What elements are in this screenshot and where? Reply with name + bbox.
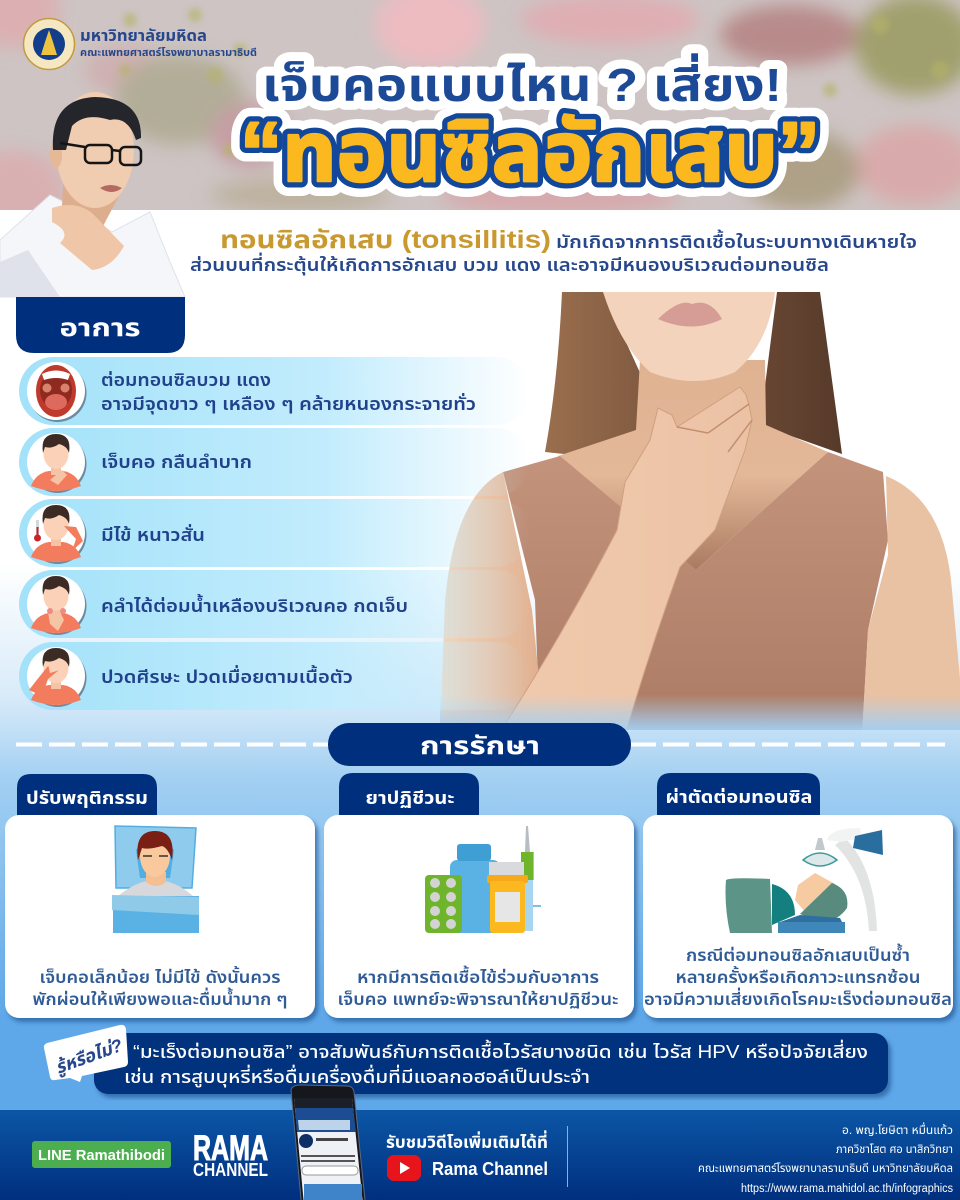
photo bottom fade <box>440 695 960 731</box>
icon: university seal <box>24 18 74 70</box>
logo and institution <box>24 18 257 70</box>
callout: did you know: “มะเร็งต่อมทอนซิล” อาจสัมพันธ์กับการติดเชื้อไวรัสบางชนิด เช่น ไวรัส HPV หรือปัจจัยเสี่ยง <box>133 1039 868 1062</box>
symptom 1: อาจมีจุดขาว ๆ เหลือง ๆ คล้ายหนองกระจายทั่ว <box>101 393 476 415</box>
text: antibiotics advice: เจ็บคอ แพทย์จะพิจารณาให้ยาปฏิชีวนะ <box>338 990 619 1009</box>
dress <box>503 452 888 735</box>
raised arm and hand <box>498 387 752 735</box>
lips <box>658 303 722 326</box>
credits: https://www.rama.mahidol.ac.th/infographics <box>741 1183 953 1195</box>
text: surgery advice: กรณีต่อมทอนซิลอักเสบเป็นซ้ำ <box>686 943 910 965</box>
neck and chest <box>558 360 828 570</box>
icon: headache person <box>27 647 86 707</box>
heading: treatment <box>328 723 631 766</box>
faculty name: คณะแพทยศาสตร์โรงพยาบาลรามาธิบดี <box>80 47 257 59</box>
text: behaviour advice: เจ็บคอเล็กน้อย ไม่มีไข้ ดังนั้นควร <box>40 966 280 987</box>
photo: man holding throat <box>0 92 185 297</box>
text: behaviour advice <box>32 966 288 1009</box>
button: LINE Ramathibodi <box>32 1141 171 1168</box>
symptom 5 <box>19 642 530 710</box>
phone mockup <box>291 1085 366 1200</box>
tab: symptoms: อาการ <box>60 314 141 342</box>
face <box>603 292 775 381</box>
icon: YouTube <box>387 1155 421 1181</box>
tab: behaviour: ปรับพฤติกรรม <box>26 788 148 808</box>
symptom 4: คลำได้ต่อมน้ำเหลืองบริเวณคอ กดเจ็บ <box>101 594 408 616</box>
text: surgery advice: หลายครั้งหรือเกิดภาวะแทรกซ้อน <box>676 966 920 987</box>
title line 2: “ทอนซิลอักเสบ” <box>240 105 820 199</box>
logo: RAMA CHANNEL: RAMA <box>193 1129 268 1168</box>
symptom 4 <box>19 570 530 638</box>
intro text: มักเกิดจากการติดเชื้อในระบบทางเดินหายใจ <box>556 229 917 252</box>
text: surgery advice: อาจมีความเสี่ยงเกิดโรคมะเร็งต่อมทอนซิล <box>644 987 952 1009</box>
title line 1: เจ็บคอแบบไหน ? เสี่ยง! <box>262 53 782 111</box>
channel call to action: Rama Channel <box>432 1159 548 1179</box>
symptom 1 <box>19 357 530 425</box>
speech bubble: did you know <box>44 1025 128 1082</box>
panel: surgery <box>643 773 953 1018</box>
text: antibiotics advice <box>338 965 619 1009</box>
credits: คณะแพทยศาสตร์โรงพยาบาลรามาธิบดี มหาวิทยาลัยมหิดล <box>698 1162 953 1175</box>
photo: woman holding throat <box>440 292 960 735</box>
footer divider <box>567 1126 568 1187</box>
icon: medicine bottles and syringe <box>425 826 541 933</box>
left arm <box>440 472 538 723</box>
credits: อ. พญ.โยษิตา หมื่นแก้ว <box>842 1122 953 1137</box>
panel: behaviour <box>5 774 315 1018</box>
right arm <box>862 476 960 735</box>
panel: antibiotics <box>324 773 634 1018</box>
credits: ภาควิชาโสต ศอ นาสิกวิทยา <box>836 1143 953 1156</box>
icon: fever person <box>27 504 86 564</box>
intro text: ทอนซิลอักเสบ (tonsillitis) <box>220 226 551 254</box>
tab: symptoms <box>16 297 185 353</box>
footer band <box>0 1110 960 1200</box>
tab: surgery: ผ่าตัดต่อมทอนซิล <box>666 787 812 807</box>
tab: behaviour <box>17 774 157 820</box>
icon: sleeping person <box>112 826 199 933</box>
title line 2: “ทอนซิลอักเสบ” <box>240 105 820 199</box>
symptom 2: เจ็บคอ กลืนลำบาก <box>101 452 252 472</box>
channel call to action <box>386 1130 548 1181</box>
button: LINE Ramathibodi: LINE Ramathibodi <box>38 1147 165 1164</box>
symptom 3 <box>19 499 530 567</box>
dashed divider <box>16 742 945 746</box>
logo: RAMA CHANNEL <box>193 1129 268 1180</box>
tab: surgery <box>657 773 820 820</box>
symptom 2 <box>19 428 530 496</box>
symptom 5: ปวดศีรษะ ปวดเมื่อยตามเนื้อตัว <box>101 665 353 687</box>
header background: virus photo <box>0 0 960 230</box>
hair <box>545 292 842 462</box>
icon: sore throat person <box>27 433 86 493</box>
symptom 3: มีไข้ หนาวสั่น <box>101 524 205 545</box>
credits <box>698 1122 953 1195</box>
heading: treatment: การรักษา <box>420 732 540 760</box>
callout: did you know: เช่น การสูบบุหรี่หรือดื่มเครื่องดื่มที่มีแอลกอฮอล์เป็นประจำ <box>124 1064 590 1089</box>
icon: patient with anaesthesia mask <box>726 828 883 933</box>
speech bubble: did you know: รู้หรือไม่? <box>53 1035 125 1079</box>
text: behaviour advice: พักผ่อนให้เพียงพอและดื่มน้ำมาก ๆ <box>32 987 288 1009</box>
intro text <box>190 226 917 276</box>
text: surgery advice <box>644 943 952 1009</box>
intro text: ส่วนบนที่กระตุ้นให้เกิดการอักเสบ บวม แดง และอาจมีหนองบริเวณต่อมทอนซิล <box>190 252 829 276</box>
channel call to action: รับชมวิดีโอเพิ่มเติมได้ที่ <box>386 1130 548 1152</box>
title line 2: “ทอนซิลอักเสบ” <box>240 105 820 199</box>
institution name: มหาวิทยาลัยมหิดล <box>80 28 207 45</box>
icon: open mouth <box>27 362 86 422</box>
white intro band <box>0 210 960 295</box>
text: antibiotics advice: หากมีการติดเชื้อไข้ร่วมกับอาการ <box>357 965 599 987</box>
icon: swollen lymph node person <box>27 575 86 635</box>
symptom 1: ต่อมทอนซิลบวม แดง <box>101 370 271 390</box>
tab: antibiotics: ยาปฏิชีวนะ <box>366 788 454 808</box>
logo: RAMA CHANNEL: CHANNEL <box>193 1160 268 1180</box>
tab: antibiotics <box>339 773 479 820</box>
callout: did you know <box>44 1025 888 1094</box>
